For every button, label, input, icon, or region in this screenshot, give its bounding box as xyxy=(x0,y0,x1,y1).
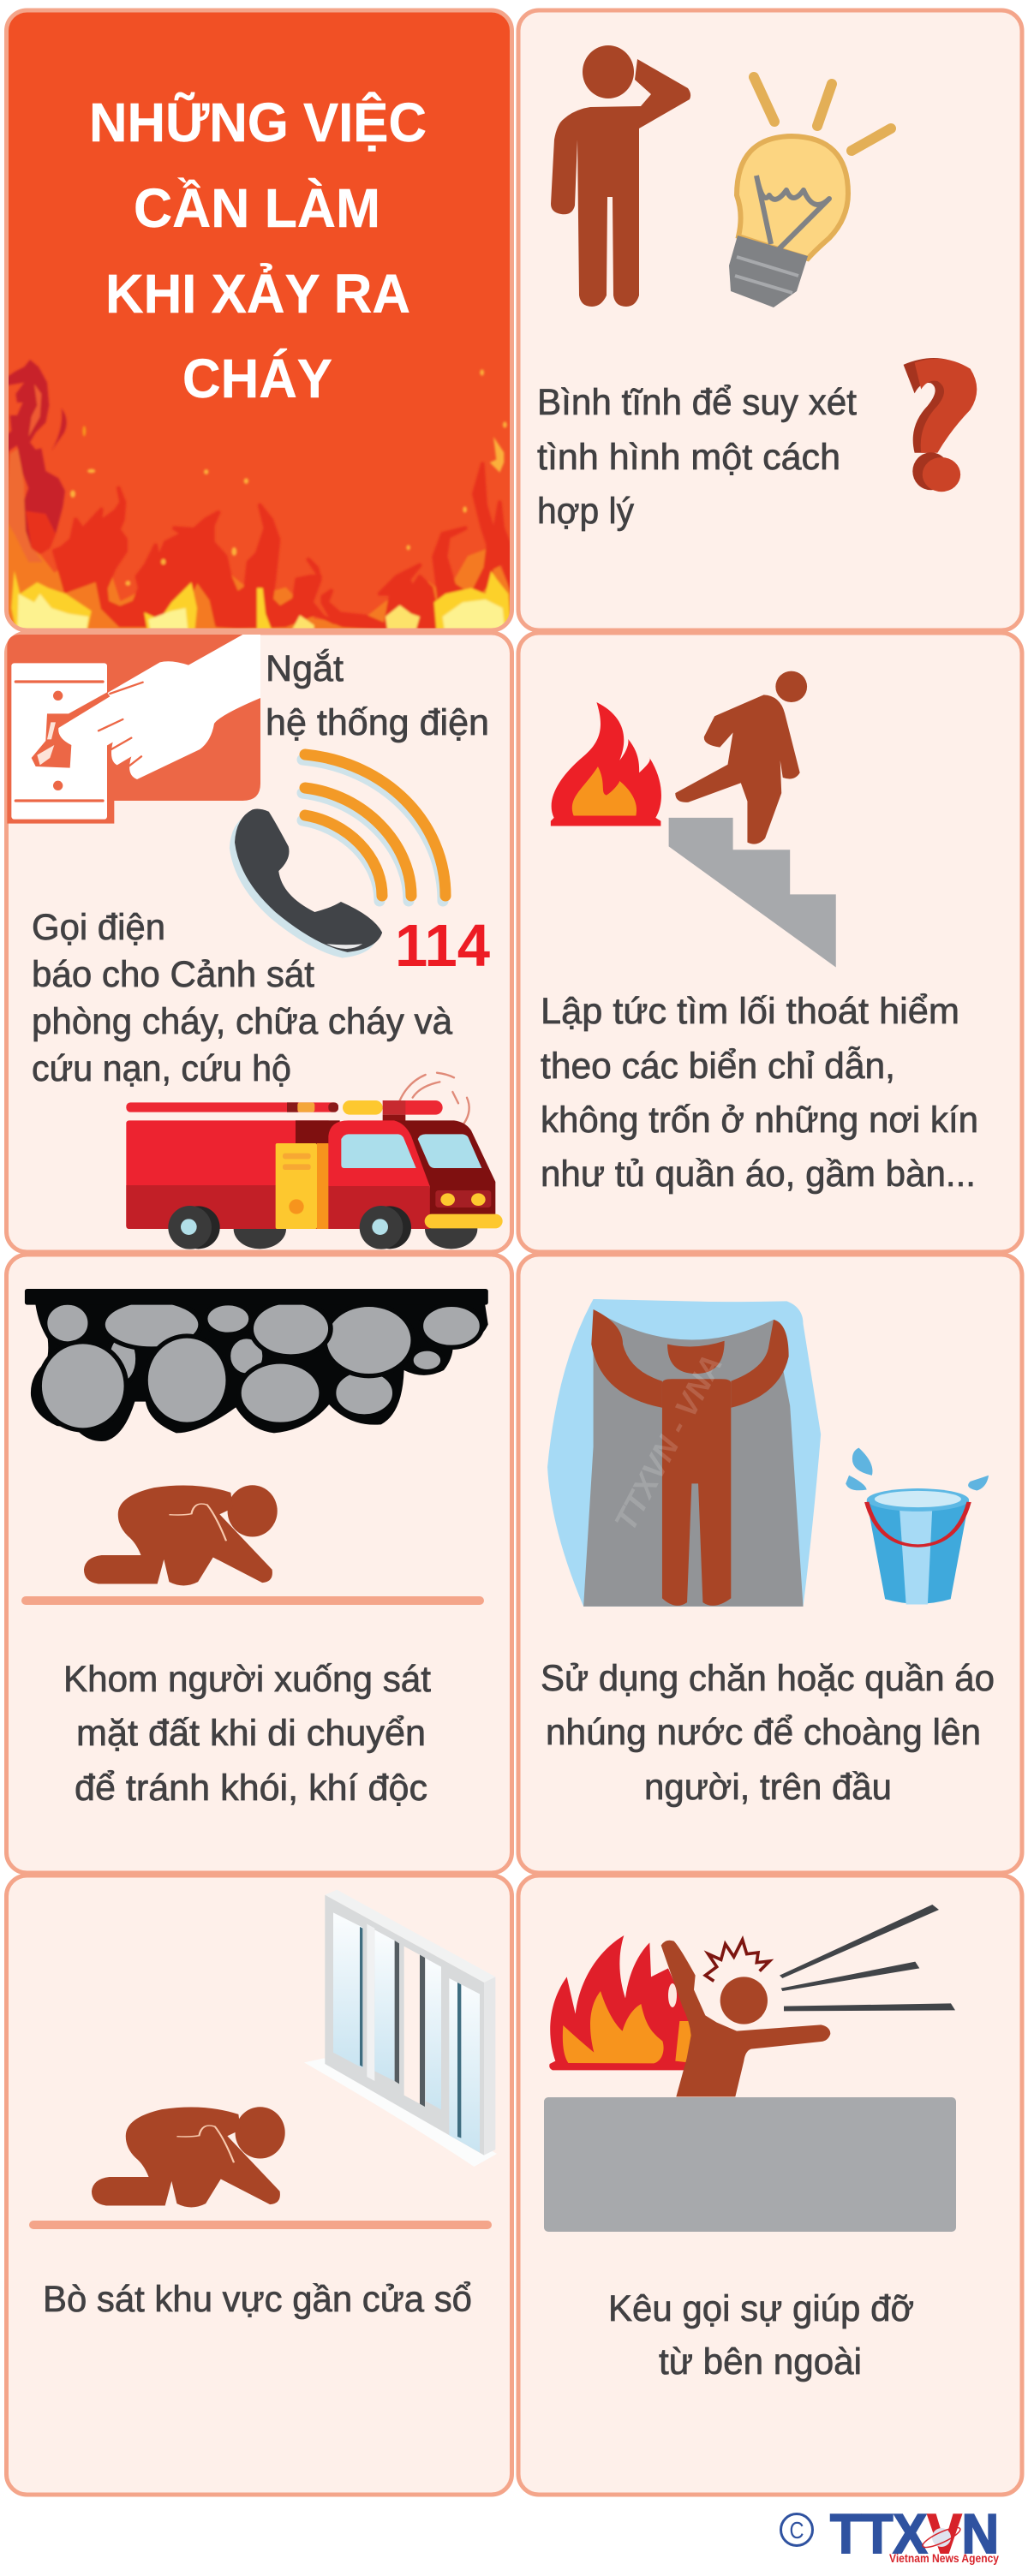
text: wet blanket: người, trên đầu xyxy=(644,1767,892,1808)
text: wet blanket xyxy=(541,1658,995,1808)
text: call for help: Kêu gọi sự giúp đỡ xyxy=(608,2288,914,2329)
text: call: Gọi điện xyxy=(32,907,165,948)
panel: call for help xyxy=(518,1875,1022,2495)
icon: thinking person xyxy=(551,45,690,307)
panel: wet blanket xyxy=(518,1255,1022,1873)
text: find exit: như tủ quần áo, gầm bàn... xyxy=(541,1154,976,1195)
text: stay calm: hợp lý xyxy=(537,491,634,532)
heading: NHỮNG VIỆC xyxy=(89,91,427,153)
text: stay calm: tình hình một cách xyxy=(537,437,840,478)
panel: stay calm xyxy=(518,10,1022,630)
icon: question mark xyxy=(904,358,977,492)
heading xyxy=(89,91,427,409)
icon: person under wet blanket xyxy=(547,1299,821,1607)
icon: light bulb xyxy=(729,77,891,307)
text: cut power: Ngắt xyxy=(266,648,344,689)
text: cut power xyxy=(266,648,489,743)
icon: person calling for help near fire xyxy=(549,1905,955,2096)
heading: CHÁY xyxy=(182,348,332,409)
text: cut power: hệ thống điện xyxy=(266,702,489,743)
heading: KHI XẢY RA xyxy=(105,262,410,325)
panel: title xyxy=(4,10,517,636)
icon: hand on switch xyxy=(7,635,260,824)
panel: find exit xyxy=(518,633,1022,1252)
text: call: phòng cháy, chữa cháy và xyxy=(32,1001,452,1042)
icon: crouching person xyxy=(84,1485,278,1585)
logo: TTXVN: C xyxy=(790,2517,804,2543)
panel: cut power and call 114 xyxy=(7,633,512,1252)
text: find exit: theo các biển chỉ dẫn, xyxy=(541,1046,895,1087)
icon: person running down stairs from fire xyxy=(551,671,836,968)
icon: water bucket xyxy=(846,1448,989,1604)
icon: crawling person xyxy=(92,2107,285,2207)
floor line xyxy=(29,2221,492,2229)
text: find exit xyxy=(541,991,978,1195)
watermark: TTXVN - VNA xyxy=(607,1349,729,1536)
logo: TTXVN: TTXVN xyxy=(830,2502,999,2565)
text: crouch: Khom người xuống sát xyxy=(63,1659,431,1700)
icon: telephone with signal arcs xyxy=(230,754,445,958)
text: call for help: từ bên ngoài xyxy=(659,2341,862,2382)
flames decoration xyxy=(4,360,517,636)
text: crouch: mặt đất khi di chuyển xyxy=(76,1713,426,1754)
icon: window xyxy=(304,1890,497,2167)
text: call xyxy=(32,907,452,1089)
text: crouch xyxy=(63,1659,431,1809)
text: wet blanket: nhúng nước để choàng lên xyxy=(546,1712,981,1753)
text: crawl: Bò sát khu vực gần cửa sổ xyxy=(43,2279,472,2320)
text: find exit: không trốn ở những nơi kín xyxy=(541,1100,978,1141)
icon: fire truck xyxy=(126,1073,503,1249)
text: wet blanket: Sử dụng chăn hoặc quần áo xyxy=(541,1658,995,1699)
heading: CẦN LÀM xyxy=(134,177,380,239)
number: 114: 114 xyxy=(395,912,490,979)
panel: crouch under smoke xyxy=(7,1255,512,1873)
text: call: báo cho Cảnh sát xyxy=(32,954,314,995)
panel: crawl near window xyxy=(7,1875,512,2495)
floor line xyxy=(21,1596,484,1605)
text: stay calm xyxy=(537,382,857,532)
text: stay calm: Bình tĩnh để suy xét xyxy=(537,382,857,423)
grey wall xyxy=(544,2097,956,2232)
text: crouch: để tránh khói, khí độc xyxy=(75,1768,427,1809)
logo: TTXVN: Vietnam News Agency xyxy=(889,2551,999,2565)
text: find exit: Lập tức tìm lối thoát hiểm xyxy=(541,991,959,1032)
icon: smoke under ceiling xyxy=(25,1289,488,1441)
text: call for help xyxy=(608,2288,914,2382)
text: call: cứu nạn, cứu hộ xyxy=(32,1048,291,1089)
